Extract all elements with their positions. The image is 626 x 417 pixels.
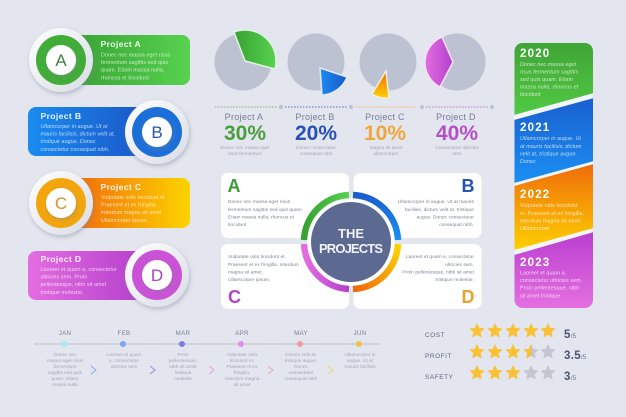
year 2021: Donec (520, 159, 536, 165)
quadrant A (221, 173, 349, 238)
stat: Project D 40%: sem (452, 152, 462, 157)
card: Project A: Project A (100, 39, 141, 49)
month JAN (47, 330, 84, 388)
rating: safety (425, 366, 577, 383)
month JUN (344, 330, 376, 370)
month JUN: JUN (354, 330, 366, 337)
card: Project B: tristique augue. Donec (40, 139, 96, 145)
year 2023: Laoreet et quam a, (520, 270, 566, 276)
month MAY (285, 330, 318, 382)
panel: percentages (220, 112, 479, 157)
pie chart: Project D (425, 34, 486, 90)
month FEB: ultricies sem (111, 364, 137, 370)
month MAR: Proin (177, 352, 189, 358)
year 2021: at mauris facilisis, dictum (520, 144, 582, 150)
panel: timeline (35, 330, 380, 388)
quadrant A: A (228, 176, 240, 196)
quadrant A: tincidunt (228, 222, 247, 228)
stat: Project B 20%: Project B (295, 112, 335, 122)
year 2020: tincidunt (520, 92, 541, 98)
year 2022: et. Praesent et ex fringilla, (520, 211, 584, 217)
year 2020: 2020 (520, 48, 550, 60)
month JAN: Donec nec (54, 352, 77, 358)
month MAR: MAR (176, 330, 191, 337)
card: Project D: Project D (40, 254, 81, 264)
card: Project A: fermentum sagittis sed quis (101, 60, 168, 66)
year 2022: interdum magna sit amet. (520, 218, 582, 224)
year 2020: massa nulla, rhoncus et (520, 84, 579, 90)
month JUN: Ullamcorper in (345, 352, 376, 358)
month MAY: consectetur (289, 370, 314, 376)
central circle: PROJECTS (319, 241, 383, 256)
month JAN: massa eget risus (47, 358, 84, 364)
card: Project A: quam. Etiam massa nulla, (101, 68, 164, 74)
card: Project B: mauris facilisis, dictum velit at, (40, 132, 115, 138)
month JUN: mauris facilisis (344, 364, 376, 370)
card: Project C: C (55, 194, 67, 213)
rating: cost: COST (425, 332, 445, 339)
quadrant C: C (228, 287, 241, 307)
stat: Project A 30%: risus fermentum (228, 151, 262, 157)
year 2022: Vulputate odio tincidunt (520, 203, 578, 209)
month MAR: pellentesque, (169, 358, 197, 364)
month MAR (169, 330, 197, 382)
pie chart: Project A (214, 30, 276, 90)
rating: profit (425, 345, 587, 362)
quadrant B: consequat nibh. (439, 222, 474, 228)
month FEB: a, consectetur (109, 358, 139, 364)
stat: Project C 10%: ullamcorper (373, 151, 399, 157)
month FEB (107, 330, 141, 370)
central circle: THE (338, 226, 364, 241)
card: Project C: Ullamcorper ipsum. (101, 218, 148, 224)
month MAY: MAY (294, 330, 308, 337)
stat: Project D 40%: Project D (436, 112, 476, 122)
panel: project cards (28, 28, 190, 307)
central circle (304, 195, 398, 289)
year 2022 (514, 164, 594, 250)
quadrant C (221, 244, 349, 309)
stat: Project C 10%: Project C (365, 112, 405, 122)
month MAR: nibh sit amet (169, 364, 197, 370)
month JAN: sagittis sed quis (48, 370, 83, 376)
year 2023: Proin pellentesque, nibh (520, 286, 579, 292)
month APR: fringilla, (234, 370, 250, 376)
panel: pie charts (214, 30, 486, 98)
card: Project C (29, 171, 190, 235)
rating: safety: 3/5 (564, 371, 577, 383)
month MAY: consequat nibh (285, 376, 318, 382)
stat: Project B 20%: 20% (295, 122, 337, 145)
card: Project C: Vulputate odio tincidunt et (101, 195, 165, 201)
month APR: sit amet (234, 382, 251, 388)
month JUN: augue. Ut at (347, 358, 374, 364)
quadrant B: augue. Donec consectetur (417, 214, 474, 220)
month JAN: JAN (59, 330, 71, 337)
quadrant D: D (462, 287, 474, 307)
stat: Project B 20%: Donec consectetur (296, 145, 336, 151)
rating: cost: 5/5 (564, 329, 577, 341)
month JAN: fermentum (54, 364, 76, 370)
rating: profit: PROFIT (425, 353, 452, 360)
month JAN: massa nulla (52, 382, 78, 388)
month APR: APR (235, 330, 249, 337)
quadrant D: Laoreet et quam a, consectetur (406, 254, 474, 260)
rating: cost (425, 324, 577, 341)
panel: ratings (425, 324, 587, 383)
card: Project D: pellentesque, nibh sit amet (40, 282, 107, 288)
quadrant D: tristique molestie. (436, 277, 474, 283)
stat: Project D 40% (435, 112, 479, 157)
card: Project D: Laoreet et quam a, consectetur (40, 267, 117, 273)
year 2020 (514, 43, 594, 115)
quadrant B: B (462, 176, 474, 196)
stat: Project B 20%: consequat nibh (300, 151, 333, 157)
stat: Project C 10%: Magna sit amet (370, 145, 403, 151)
quadrant C: Vulputate odio tincidunt et. (228, 254, 286, 260)
year 2022: Ullamcorper (520, 226, 550, 232)
year 2020: Donec nec massa eget (520, 62, 577, 68)
rating: safety: SAFETY (425, 374, 454, 381)
quadrant D (354, 244, 482, 309)
rating: profit: 3.5/5 (564, 350, 587, 362)
month APR (225, 330, 260, 388)
quadrant B: facilisis, dictum velit at, tristique (405, 207, 474, 213)
quadrant A: fermentum sagittis sed quis quam. (228, 207, 303, 213)
month FEB: FEB (118, 330, 130, 337)
year 2023: 2023 (520, 257, 550, 269)
stat: Project B 20% (295, 112, 337, 157)
card: Project B: B (151, 123, 163, 142)
year 2020: risus fermentum sagittis (520, 70, 579, 76)
stat: Project A 30%: Donec nec massa eget (220, 145, 270, 151)
stat: Project A 30% (220, 112, 270, 157)
quadrant B: Ullamcorper in augue. Ut at mauris (398, 199, 475, 205)
year 2023 (514, 232, 594, 308)
month APR: interdum magna (225, 376, 260, 382)
quadrant A: Etiam massa nulla, rhoncus et (228, 214, 295, 220)
card: Project A: rhoncus et tincidunt (101, 76, 149, 82)
stat: Project C 10%: 10% (364, 122, 406, 145)
card: Project C: interdum magna sit amet (101, 210, 162, 216)
year 2023: sit amet tristique (520, 294, 560, 300)
arrows (91, 366, 333, 374)
card: Project A: A (55, 51, 67, 70)
month MAY: Donec (294, 364, 309, 370)
quadrant B (354, 173, 482, 238)
year 2021 (514, 98, 594, 183)
card: Project B: Ullamcorper in augue. Ut at (40, 124, 108, 130)
quadrant A: Donec nec massa eget risus (228, 199, 291, 205)
card: Project D: D (151, 266, 163, 285)
panel: year column (514, 43, 594, 308)
quadrant D: ultricies sem. (445, 262, 474, 268)
card: Project B: Project B (40, 111, 81, 121)
quadrant D: Proin pellentesque, nibh sit amet (402, 270, 475, 276)
quadrant C: Ullamcorper ipsum. (228, 277, 270, 283)
year 2021: velit at, tristique augue. (520, 152, 577, 158)
month MAR: molestie (174, 376, 192, 382)
card: Project D: tristique molestie. (40, 290, 84, 296)
card: Project A (29, 28, 190, 92)
card: Project D: ultricies sem. Proin (40, 274, 87, 280)
stat: Project D 40%: Consectetur ultricies (435, 145, 479, 151)
stat: Project D 40%: 40% (436, 122, 478, 145)
month FEB: Laoreet et quam (107, 352, 141, 358)
year 2020: sed quis quam. Etiam (520, 77, 573, 83)
card: Project B (28, 100, 189, 164)
card: Project C: Project C (100, 182, 141, 192)
month APR: tincidunt et. (230, 358, 254, 364)
stat: Project A 30%: Project A (225, 112, 263, 122)
stat: Project C 10% (364, 112, 406, 157)
year 2021: Ullamcorper in augue. Ut (520, 136, 581, 142)
year 2022: 2022 (520, 189, 550, 201)
month MAY: Dictum velit at, (285, 352, 317, 358)
pie chart: Project B (288, 34, 347, 95)
year 2023: consectetur ultricies sem. (520, 278, 582, 284)
card: Project D (28, 243, 189, 307)
month APR: Praesent et ex (227, 364, 258, 370)
card: Project C: Praesent et ex fringilla (101, 202, 156, 208)
card: Project B: consectetur consequat nibh. (40, 147, 109, 153)
year 2021: 2021 (520, 122, 550, 134)
month JAN: quam. Etiam (52, 376, 78, 382)
stat: Project A 30%: 30% (224, 122, 266, 145)
quadrant C: magna sit amet. (228, 270, 263, 276)
quadrant C: Praesent et ex fringilla, interdum (228, 262, 299, 268)
dotted dividers (215, 105, 494, 109)
panel: the projects quadrant (221, 173, 482, 309)
card: Project A: Donec nec massa eget risus (101, 52, 171, 58)
month MAR: tristique (175, 370, 192, 376)
pie chart: Project C (360, 34, 416, 98)
month APR: Vulputate odio (227, 352, 258, 358)
month MAY: tristique augue. (285, 358, 317, 364)
